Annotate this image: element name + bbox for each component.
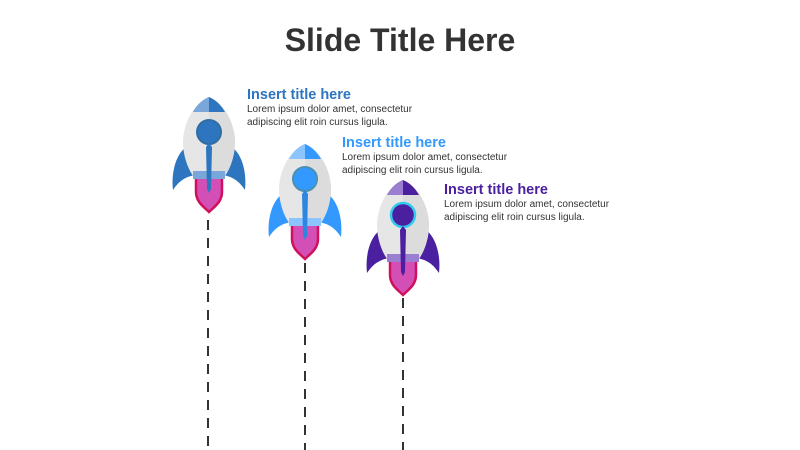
rocket 3 xyxy=(367,180,439,295)
dashed trails xyxy=(208,220,403,450)
text block 3 xyxy=(444,182,609,222)
rocket 1 xyxy=(173,97,245,212)
text block 2: Lorem ipsum dolor amet, consectetur xyxy=(342,152,507,163)
text block 3: Insert title here xyxy=(444,182,548,198)
text block 3: Lorem ipsum dolor amet, consectetur xyxy=(444,199,609,210)
text block 2: adipiscing elit roin cursus ligula. xyxy=(342,164,483,176)
text block 1: Lorem ipsum dolor amet, consectetur xyxy=(247,104,412,115)
text block 3: adipiscing elit roin cursus ligula. xyxy=(444,212,585,222)
title: Slide Title Here xyxy=(285,22,515,58)
text block 1: adipiscing elit roin cursus ligula. xyxy=(247,116,388,128)
text block 1 xyxy=(247,87,412,128)
rocket 2 xyxy=(269,144,341,259)
text block 1: Insert title here xyxy=(247,87,351,103)
text block 2 xyxy=(342,135,507,176)
text block 2: Insert title here xyxy=(342,135,446,151)
